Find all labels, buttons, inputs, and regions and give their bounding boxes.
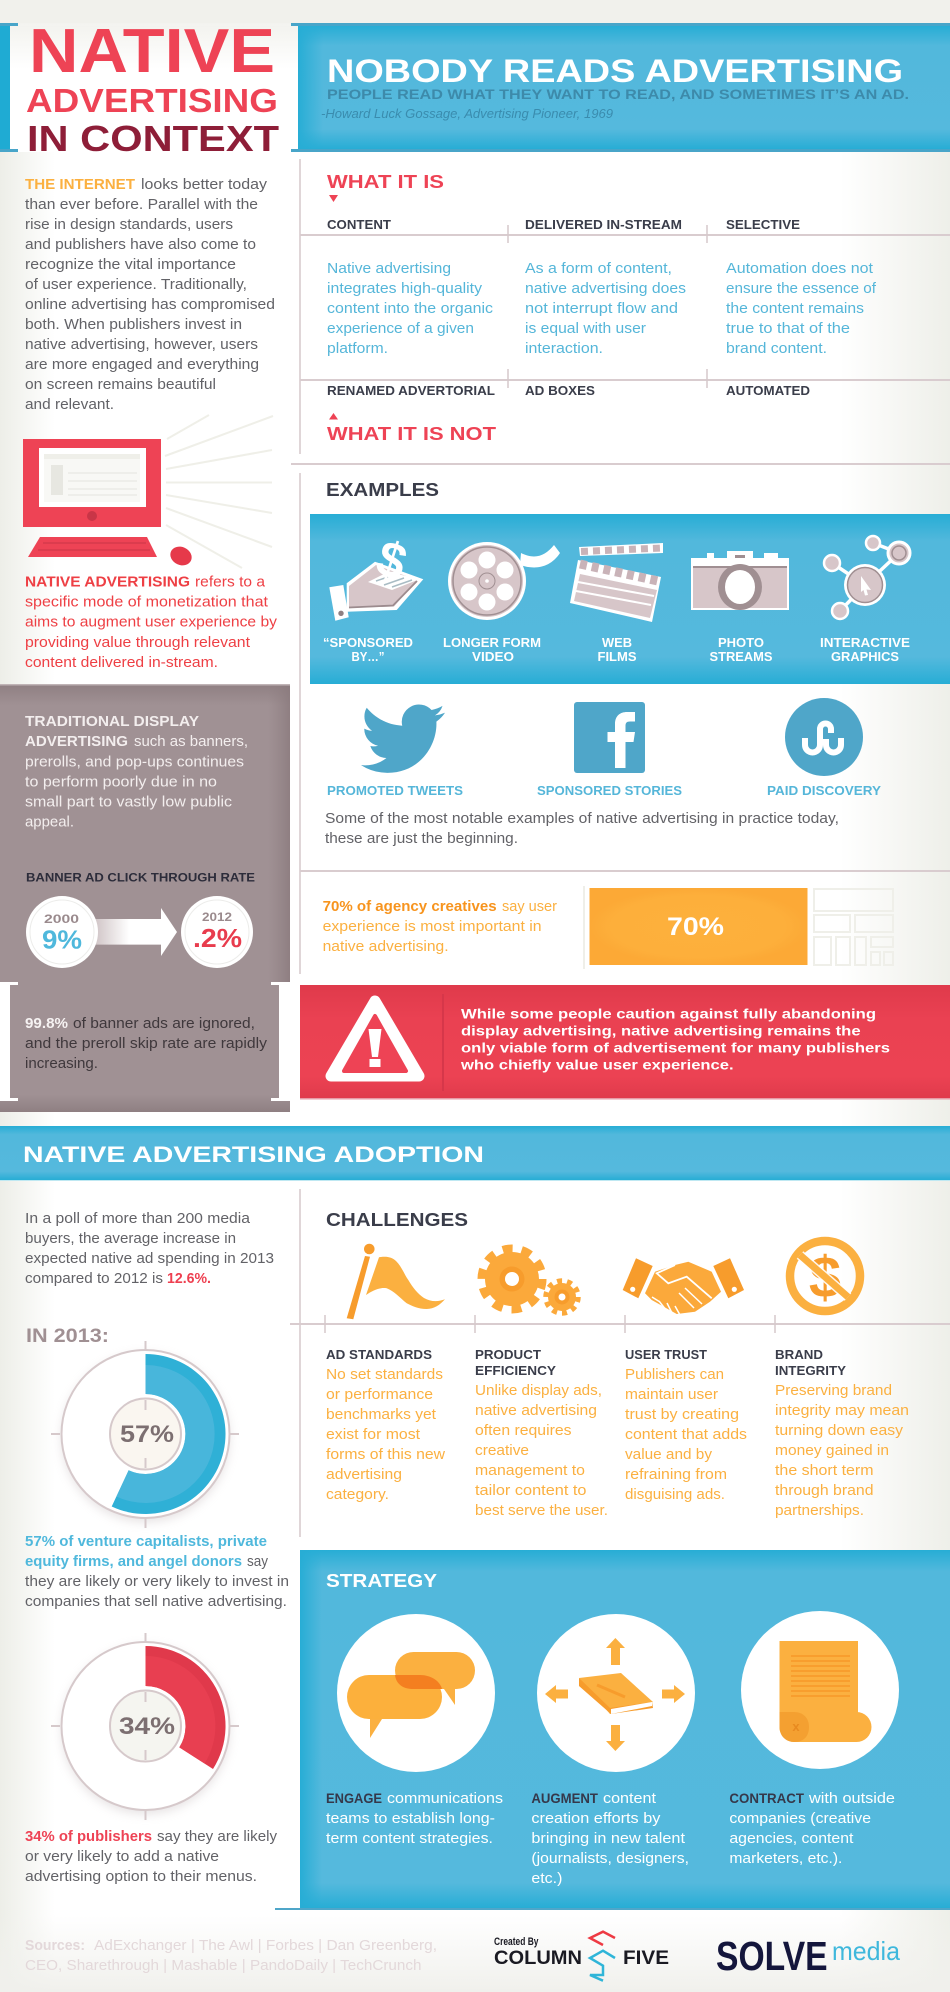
logo: column five: COLUMN xyxy=(494,1948,582,1969)
text: delivered in-stream: interaction. xyxy=(525,341,603,357)
text: delivered in-stream: is equal with user xyxy=(525,321,646,337)
heading: banner ad click through rate: BANNER AD CLICK THROUGH RATE xyxy=(26,871,255,885)
social labels: SPONSORED STORIES xyxy=(537,784,682,798)
icon: speech bubbles xyxy=(337,1614,495,1772)
challenge: product efficiency: EFFICIENCY xyxy=(475,1364,557,1378)
text: banner ads ignored xyxy=(25,1016,268,1072)
text: 34 percent publishers: 34% of publishers xyxy=(25,1829,152,1845)
heading: examples: EXAMPLES xyxy=(326,480,439,500)
panel: traditional display advertising xyxy=(0,684,290,1112)
heading: what it is: WHAT IT IS xyxy=(327,172,444,192)
title: NATIVE xyxy=(29,17,275,86)
bottom column labels: RENAMED ADVERTORIAL xyxy=(327,384,495,398)
text: 34 percent publishers: or very likely to add a native xyxy=(25,1849,219,1865)
text: agency creatives: native advertising. xyxy=(323,939,449,955)
title xyxy=(26,17,279,159)
text: 57 percent investors: 57% of venture capitalists, private xyxy=(25,1534,267,1550)
text: native advertising definition: content delivered in-stream. xyxy=(25,655,218,671)
text: banner ads ignored: of banner ads are ignored, xyxy=(73,1016,255,1032)
header banner xyxy=(0,23,950,152)
challenge: ad standards: category. xyxy=(326,1487,389,1503)
text: delivered in-stream: native advertising does xyxy=(525,281,686,297)
icon: sponsored hand xyxy=(329,529,423,621)
intro text: the internet: are more engaged and everything xyxy=(25,357,259,373)
panel: what it is / what it is not xyxy=(291,159,950,464)
sources: AdExchanger | The Awl | Forbes | Dan Greenberg, xyxy=(94,1938,437,1954)
social labels: PROMOTED TWEETS xyxy=(327,784,463,798)
icon: handshake xyxy=(623,1258,744,1315)
challenge: brand integrity: partnerships. xyxy=(775,1503,864,1519)
stat circle: 2012: 2012 xyxy=(202,910,232,924)
heading: strategy: STRATEGY xyxy=(326,1571,437,1591)
intro text: the internet: of user experience. Traditionally, xyxy=(25,277,247,293)
challenge: product efficiency: Unlike display ads, xyxy=(475,1383,602,1399)
strategy: augment xyxy=(531,1790,689,1887)
text: 57 percent investors: they are likely or very likely to invest in xyxy=(25,1574,289,1590)
challenge: user trust: trust by creating xyxy=(625,1407,739,1423)
challenge: user trust: Publishers can xyxy=(625,1367,724,1383)
icon: stumbleupon xyxy=(785,698,863,776)
icon: sponsored hand: $ xyxy=(370,529,414,591)
icon: up triangle xyxy=(329,413,338,420)
chart: 70 percent of layout: 70% xyxy=(667,913,724,941)
intro text: the internet: than ever before. Parallel with the xyxy=(25,197,258,213)
text: warning: display advertising, native advertising remains the xyxy=(461,1024,861,1039)
header quote xyxy=(321,53,909,121)
icon: gears xyxy=(482,1248,578,1313)
challenge: product efficiency: PRODUCT xyxy=(475,1348,541,1362)
challenge: product efficiency: best serve the user. xyxy=(475,1503,608,1519)
example labels xyxy=(323,636,910,664)
section banner: native advertising adoption: NATIVE ADVERTISING ADOPTION xyxy=(23,1142,484,1167)
text: traditional display advertising: prerolls, and pop-ups continues xyxy=(25,754,244,770)
examples blue band xyxy=(310,514,950,684)
text: traditional display advertising: ADVERTISING xyxy=(25,734,128,750)
text: examples note: these are just the beginning. xyxy=(325,831,518,847)
strategy: contract: marketers, etc.). xyxy=(729,1851,842,1867)
text: 34 percent publishers: say they are likely xyxy=(157,1829,278,1845)
bottom column labels: AUTOMATED xyxy=(726,384,810,398)
icon: no dollar: $ xyxy=(809,1245,841,1310)
icon: film reel xyxy=(448,542,560,620)
text: examples note: Some of the most notable examples of native advertising in practice today, xyxy=(325,811,839,827)
intro text: the internet xyxy=(25,177,275,413)
chart: 57 percent donut: 57% xyxy=(120,1421,174,1448)
text: delivered in-stream xyxy=(525,261,686,357)
text: traditional display advertising: appeal. xyxy=(25,815,74,831)
text: traditional display advertising: to perform poorly due in no xyxy=(25,774,217,790)
icon: warning triangle xyxy=(331,1001,419,1076)
header quote: PEOPLE READ WHAT THEY WANT TO READ, AND SOMETIMES IT’S AN AD. xyxy=(327,86,909,102)
text: selective: ensure the essence of xyxy=(726,281,877,297)
panel brackets xyxy=(0,982,290,1101)
text: media buyers poll: In a poll of more than 200 media xyxy=(25,1211,251,1227)
stat circle: 2000: 2000 xyxy=(44,912,79,926)
challenge: user trust: USER TRUST xyxy=(625,1348,707,1362)
challenge: ad standards: No set standards xyxy=(326,1367,443,1383)
text: traditional display advertising: such as banners, xyxy=(134,734,248,750)
text: media buyers poll: compared to 2012 is xyxy=(25,1271,163,1287)
text: warning: While some people caution against fully abandoning xyxy=(461,1007,876,1022)
bottom column labels xyxy=(327,384,810,398)
strategy: contract xyxy=(729,1790,895,1867)
heading: in 2013: IN 2013: xyxy=(26,1325,109,1347)
intro text: the internet: and relevant. xyxy=(25,397,114,413)
header quote: -Howard Luck Gossage, Advertising Pioneer, 1969 xyxy=(321,106,613,121)
column headings xyxy=(327,218,800,232)
challenge: brand integrity: money gained in xyxy=(775,1443,889,1459)
intro text: the internet: THE INTERNET xyxy=(25,177,135,193)
example labels: GRAPHICS xyxy=(831,650,899,664)
challenge: brand integrity: integrity may mean xyxy=(775,1403,909,1419)
text: native advertising definition: providing value through relevant xyxy=(25,635,250,651)
text: native advertising definition: NATIVE ADVERTISING xyxy=(25,574,190,590)
title: IN CONTEXT xyxy=(27,118,279,159)
challenge: user trust: refraining from xyxy=(625,1467,727,1483)
strategy: augment: content xyxy=(603,1791,656,1807)
challenge: product efficiency: native advertising xyxy=(475,1403,597,1419)
bottom column labels: AD BOXES xyxy=(525,384,595,398)
challenge: user trust: value and by xyxy=(625,1447,713,1463)
chart: 34 percent donut xyxy=(51,1633,239,1820)
challenge: brand integrity: turning down easy xyxy=(775,1423,904,1439)
intro text: the internet: looks better today xyxy=(141,177,268,193)
text: media buyers poll: buyers, the average increase in xyxy=(25,1231,236,1247)
intro text: the internet: both. When publishers invest in xyxy=(25,317,242,333)
icon: computer monitor with rays xyxy=(23,415,273,569)
chart: 57 percent donut xyxy=(51,1341,239,1528)
challenge: brand integrity: INTEGRITY xyxy=(775,1364,847,1378)
text: agency creatives xyxy=(323,899,557,955)
text: native advertising definition xyxy=(25,574,278,671)
challenge: ad standards: exist for most xyxy=(326,1427,420,1443)
challenge: product efficiency xyxy=(475,1348,608,1519)
text: warning xyxy=(460,1007,890,1072)
text: traditional display advertising: small part to vastly low public xyxy=(25,795,232,811)
text: content xyxy=(327,261,493,357)
text: media buyers poll: 12.6%. xyxy=(167,1271,211,1287)
intro text: the internet: native advertising, however, users xyxy=(25,337,258,353)
icon: book with arrows xyxy=(537,1614,695,1772)
icon: interactive graphics xyxy=(824,536,910,619)
intro text: the internet: on screen remains beautiful xyxy=(25,377,216,393)
social labels: PAID DISCOVERY xyxy=(767,784,882,798)
section banner: native advertising adoption xyxy=(0,1126,950,1181)
strategy: augment: bringing in new talent xyxy=(531,1831,685,1847)
text: traditional display advertising: TRADITIONAL DISPLAY xyxy=(25,714,199,730)
text: delivered in-stream: not interrupt flow and xyxy=(525,301,678,317)
strategy: engage xyxy=(326,1790,503,1847)
panel: 70 percent stat xyxy=(300,871,950,969)
text: examples note xyxy=(325,811,839,847)
text: selective: Automation does not xyxy=(726,261,873,277)
strategy: contract: CONTRACT xyxy=(729,1790,804,1806)
panel: warning callout xyxy=(300,985,950,1100)
challenge: user trust: disguising ads. xyxy=(625,1487,725,1503)
text: delivered in-stream: As a form of content, xyxy=(525,261,672,277)
text: content: Native advertising xyxy=(327,261,451,277)
text: 34 percent publishers xyxy=(25,1829,278,1885)
challenge: product efficiency: creative xyxy=(475,1443,529,1459)
text: native advertising definition: aims to augment user experience by xyxy=(25,615,278,631)
text: agency creatives: 70% of agency creatives xyxy=(323,899,497,915)
strategy: contract: agencies, content xyxy=(729,1831,853,1847)
panel: strategy xyxy=(275,1550,950,1910)
stat circle: 2000: 9% xyxy=(42,925,82,955)
logo: column five: Created By xyxy=(494,1936,539,1948)
icon: clapperboard xyxy=(570,543,663,622)
challenge: user trust: maintain user xyxy=(625,1387,718,1403)
example labels: STREAMS xyxy=(710,650,772,664)
stat circle: 2000 xyxy=(26,896,98,968)
challenge: product efficiency: management to xyxy=(475,1463,585,1479)
challenge: ad standards: advertising xyxy=(326,1467,402,1483)
strategy: augment: AUGMENT xyxy=(531,1790,598,1806)
header quote: NOBODY READS ADVERTISING xyxy=(327,53,903,89)
sources xyxy=(25,1938,437,1974)
example labels: PHOTO xyxy=(718,636,764,650)
sources: Sources: xyxy=(25,1938,85,1954)
challenge: ad standards: forms of this new xyxy=(326,1447,446,1463)
logo: column five xyxy=(494,1932,669,1981)
text: content: integrates high-quality xyxy=(327,281,483,297)
strategy: contract: with outside xyxy=(808,1791,895,1807)
intro text: the internet: rise in design standards, users xyxy=(25,217,233,233)
text: selective: brand content. xyxy=(726,341,827,357)
icon: facebook xyxy=(574,702,645,773)
strategy: augment: etc.) xyxy=(531,1871,562,1887)
intro text: the internet: recognize the vital importance xyxy=(25,257,236,273)
challenge: ad standards: AD STANDARDS xyxy=(326,1348,432,1362)
text: traditional display advertising xyxy=(25,714,248,831)
text: content: experience of a given xyxy=(327,321,474,337)
icon: down triangle xyxy=(329,195,338,202)
strategy: contract: companies (creative xyxy=(729,1811,871,1827)
example labels: “SPONSORED xyxy=(323,636,413,650)
text: native advertising definition: specific mode of monetization that xyxy=(25,595,268,611)
text: native advertising definition: refers to a xyxy=(195,574,266,590)
text: media buyers poll xyxy=(25,1211,274,1287)
challenge: ad standards: or performance xyxy=(326,1387,433,1403)
icon: camera xyxy=(691,551,789,610)
text: selective: the content remains xyxy=(726,301,864,317)
challenge: brand integrity xyxy=(775,1348,909,1519)
challenge: ad standards: benchmarks yet xyxy=(326,1407,436,1423)
example labels: WEB xyxy=(602,636,632,650)
social labels xyxy=(327,784,882,798)
text: banner ads ignored: increasing. xyxy=(25,1056,98,1072)
column headings: DELIVERED IN-STREAM xyxy=(525,218,682,232)
text: 57 percent investors: say xyxy=(247,1554,269,1570)
challenge: brand integrity: Preserving brand xyxy=(775,1383,892,1399)
stat circle: 2012: .2% xyxy=(193,923,242,953)
text: warning: only viable form of advertisement for many publishers xyxy=(461,1041,890,1056)
example labels: FILMS xyxy=(598,650,636,664)
example labels: VIDEO xyxy=(472,650,514,664)
column headings: SELECTIVE xyxy=(726,218,800,232)
sources: CEO, Sharethrough | Mashable | PandoDaily | TechCrunch xyxy=(25,1958,422,1974)
panel: challenges xyxy=(290,1189,950,1537)
intro text: the internet: and publishers have also come to xyxy=(25,237,256,253)
text: agency creatives: experience is most important in xyxy=(323,919,542,935)
text: 57 percent investors xyxy=(25,1534,289,1610)
icon: twitter bird xyxy=(361,705,445,773)
example labels: BY…” xyxy=(352,650,384,664)
example labels: INTERACTIVE xyxy=(820,636,910,650)
text: banner ads ignored: and the preroll skip rate are rapidly xyxy=(25,1036,268,1052)
text: media buyers poll: expected native ad spending in 2013 xyxy=(25,1251,274,1267)
logo: solve media: media xyxy=(832,1936,901,1966)
icon: contract scroll xyxy=(741,1611,899,1769)
heading: challenges: CHALLENGES xyxy=(326,1210,468,1230)
text: content: platform. xyxy=(327,341,388,357)
text: content: content into the organic xyxy=(327,301,493,317)
title: ADVERTISING xyxy=(26,82,278,119)
strategy: augment: creation efforts by xyxy=(531,1811,661,1827)
example labels: LONGER FORM xyxy=(443,636,541,650)
icon: flag xyxy=(347,1244,445,1319)
text: agency creatives: say user xyxy=(502,899,557,915)
strategy: engage: communications xyxy=(387,1791,503,1807)
challenge: product efficiency: often requires xyxy=(475,1423,572,1439)
logo: solve media: SOLVE xyxy=(716,1933,828,1979)
challenge: ad standards xyxy=(326,1348,446,1503)
chart: 70 percent of layout xyxy=(590,888,893,965)
text: 57 percent investors: companies that sell native advertising. xyxy=(25,1594,287,1610)
icon: contract scroll: x xyxy=(792,1719,800,1734)
strategy: engage: term content strategies. xyxy=(326,1831,493,1847)
text: selective: true to that of the xyxy=(726,321,850,337)
text: banner ads ignored: 99.8% xyxy=(25,1016,68,1032)
challenge: brand integrity: through brand xyxy=(775,1483,874,1499)
logo: column five: FIVE xyxy=(623,1948,669,1969)
challenge: product efficiency: tailor content to xyxy=(475,1483,586,1499)
text: warning: who chiefly value user experience. xyxy=(460,1057,734,1072)
chart: 34 percent donut: 34% xyxy=(119,1713,175,1740)
challenge: brand integrity: BRAND xyxy=(775,1348,823,1362)
text: 57 percent investors: equity firms, and angel donors xyxy=(25,1554,242,1570)
challenge: brand integrity: the short term xyxy=(775,1463,874,1479)
heading: what it is not: WHAT IT IS NOT xyxy=(327,424,496,444)
strategy: engage: ENGAGE xyxy=(326,1790,382,1806)
arrow: 2000 to 2012 xyxy=(90,908,177,956)
icon: no dollar xyxy=(790,1241,860,1311)
strategy: augment: (journalists, designers, xyxy=(531,1851,689,1867)
text: 34 percent publishers: advertising option to their menus. xyxy=(25,1869,257,1885)
text: selective xyxy=(726,261,877,357)
panel: examples xyxy=(300,473,950,974)
stat circle: 2012 xyxy=(181,896,253,968)
column headings: CONTENT xyxy=(327,218,391,232)
challenge: user trust xyxy=(625,1348,747,1503)
challenge: user trust: content that adds xyxy=(625,1427,747,1443)
intro text: the internet: online advertising has compromised xyxy=(25,297,275,313)
strategy: engage: teams to establish long- xyxy=(326,1811,495,1827)
